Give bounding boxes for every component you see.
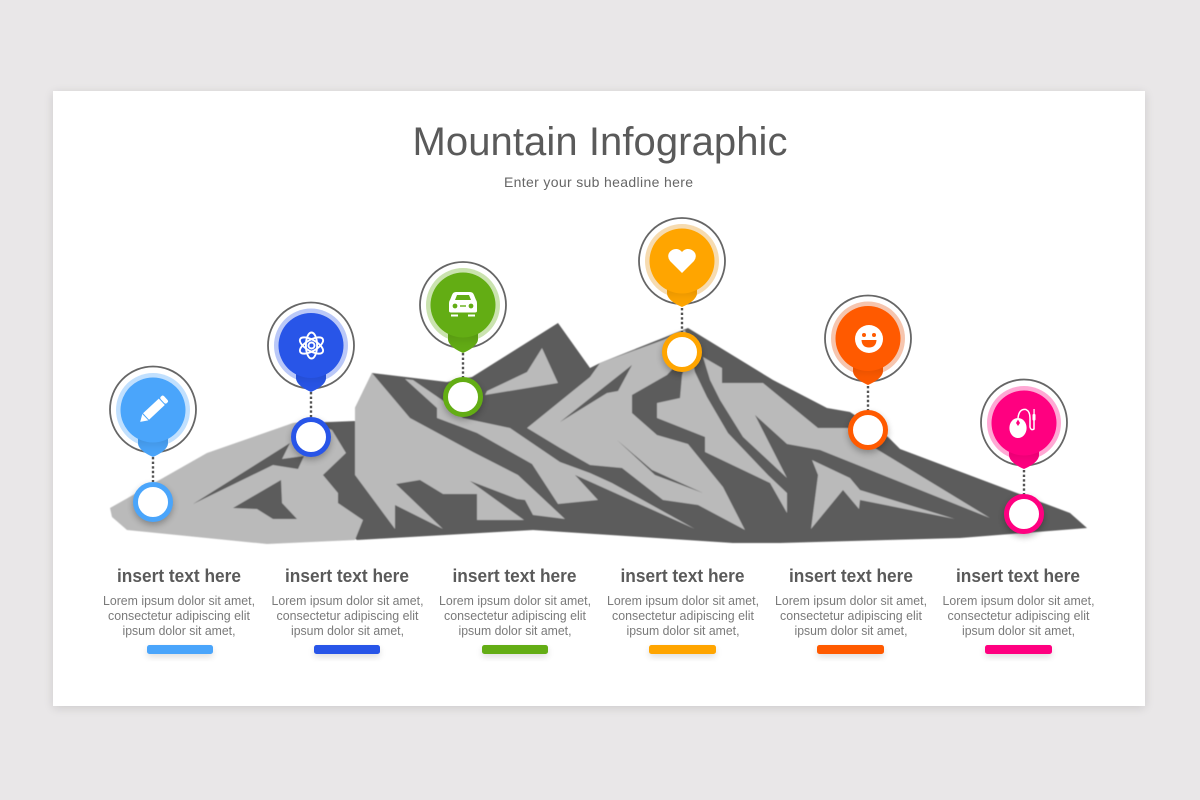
mountain illustration: [110, 323, 1087, 544]
outer ring: [981, 380, 1067, 466]
dotted connector: [462, 353, 464, 378]
marker 6: pink mouse: [981, 380, 1067, 537]
body: consectetur adipiscing elit: [780, 609, 923, 623]
node: [291, 420, 331, 460]
title: Mountain Infographic: [412, 120, 788, 164]
icon: atom: [297, 332, 326, 358]
body: consectetur adipiscing elit: [108, 609, 251, 623]
body: consectetur adipiscing elit: [612, 609, 755, 623]
body: Lorem ipsum dolor sit amet,: [439, 594, 591, 608]
pointer: [138, 435, 168, 457]
body: ipsum dolor sit amet,: [122, 624, 236, 638]
column 4 text: [607, 566, 759, 657]
disc: [278, 313, 344, 378]
pointer: [1009, 447, 1039, 469]
marker 3: green car: [420, 262, 506, 420]
colour bar: [147, 645, 213, 657]
icon: car: [449, 292, 477, 316]
disc: [836, 306, 900, 371]
body: Lorem ipsum dolor sit amet,: [272, 594, 424, 608]
outer ring: [825, 296, 911, 382]
node: [1004, 496, 1044, 537]
disc: [650, 228, 714, 294]
heading: insert text here: [285, 566, 409, 586]
subtitle: Enter your sub headline here: [504, 174, 693, 190]
marker 4: amber heart: [639, 218, 725, 375]
colour bar: [817, 645, 884, 657]
marker 5: orange smiley: [825, 296, 911, 453]
body: consectetur adipiscing elit: [948, 609, 1090, 623]
outer ring: [110, 366, 196, 452]
disc: [120, 378, 186, 442]
icon: mouse: [1009, 409, 1036, 438]
body: consectetur adipiscing elit: [276, 609, 419, 623]
body: Lorem ipsum dolor sit amet,: [103, 594, 255, 608]
outer ring: [639, 218, 725, 304]
body: [439, 594, 591, 638]
marker 1: blue pencil: [110, 366, 196, 525]
body: [775, 594, 927, 638]
body: Lorem ipsum dolor sit amet,: [775, 594, 927, 608]
body: Lorem ipsum dolor sit amet,: [607, 594, 759, 608]
halo: [831, 302, 905, 376]
column 3 text: [439, 566, 591, 657]
node: [662, 334, 702, 375]
halo: [274, 308, 348, 382]
heading: insert text here: [789, 566, 913, 586]
body: ipsum dolor sit amet,: [458, 624, 572, 638]
body: ipsum dolor sit amet,: [626, 624, 740, 638]
marker 2: dark blue atom: [268, 302, 354, 460]
body: [103, 594, 255, 638]
disc: [430, 272, 496, 338]
halo: [987, 386, 1061, 460]
column 6 text: [942, 566, 1094, 657]
halo: [426, 268, 500, 342]
colour bar: [985, 645, 1052, 657]
icon: smiley: [855, 325, 883, 353]
column 2 text: [272, 566, 424, 657]
icon: pencil: [137, 395, 169, 425]
pointer: [853, 363, 883, 385]
disc: [992, 390, 1056, 456]
colour bar: [649, 645, 716, 657]
body: Lorem ipsum dolor sit amet,: [942, 594, 1094, 608]
heading: insert text here: [620, 566, 744, 586]
body: [942, 594, 1094, 638]
heading: insert text here: [956, 566, 1080, 586]
column 1 text: [103, 566, 255, 657]
body: ipsum dolor sit amet,: [794, 624, 908, 638]
node: [133, 484, 173, 525]
dotted connector: [867, 386, 869, 411]
pointer: [667, 285, 697, 307]
colour bar: [314, 645, 380, 657]
halo: [645, 224, 719, 298]
dotted connector: [681, 308, 683, 333]
body: ipsum dolor sit amet,: [291, 624, 404, 638]
pointer: [448, 331, 478, 353]
heading: insert text here: [452, 566, 576, 586]
body: [272, 594, 424, 638]
body: ipsum dolor sit amet,: [962, 624, 1075, 638]
background card: [53, 91, 1145, 708]
node: [848, 412, 888, 453]
heading: insert text here: [117, 566, 241, 586]
node: [443, 380, 483, 420]
halo: [116, 373, 190, 447]
outer ring: [268, 302, 354, 388]
body: consectetur adipiscing elit: [444, 609, 587, 623]
body: [607, 594, 759, 638]
outer ring: [420, 262, 506, 348]
icon: heart: [668, 249, 696, 273]
dotted connector: [152, 457, 154, 482]
dotted connector: [1023, 470, 1025, 495]
colour bar: [482, 645, 548, 657]
dotted connector: [310, 392, 312, 417]
column 5 text: [775, 566, 927, 657]
pointer: [296, 370, 326, 392]
